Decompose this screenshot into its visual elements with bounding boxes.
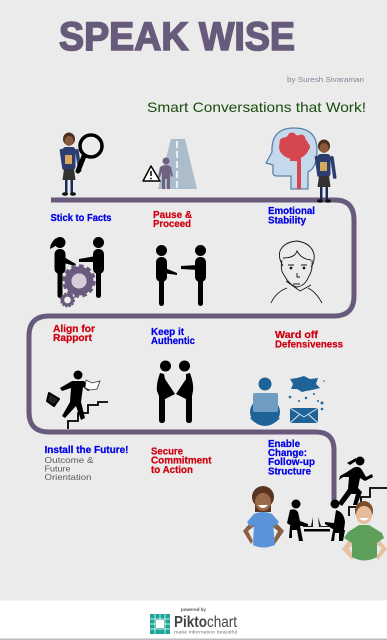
label: Emotional Stability: Emotional — [268, 205, 315, 217]
magnifying glass — [78, 135, 102, 171]
businessman — [60, 370, 92, 420]
label: Keep it Authentic: Keep it — [151, 326, 184, 338]
two people at a table — [287, 500, 345, 541]
label: Enable Change: Follow-up Structure: Follow-up — [268, 456, 315, 468]
large gear — [64, 266, 94, 296]
icon: road with warning sign — [143, 139, 197, 189]
label: Keep it Authentic: Authentic — [151, 335, 195, 347]
label: Secure Commitment to Action — [151, 446, 212, 476]
winding path — [29, 200, 354, 502]
left figure — [156, 245, 177, 306]
text: Outcome and Future Orientation: Outcome & — [44, 455, 94, 465]
left figure — [157, 360, 175, 423]
icon: student with magnifying glass — [60, 132, 102, 196]
label: Emotional Stability — [268, 205, 315, 226]
label: Ward off Defensiveness — [275, 329, 343, 350]
label: Secure Commitment to Action: to Action — [151, 464, 193, 476]
powered by: powered by — [181, 607, 206, 612]
Piktochart logo icon — [150, 614, 170, 634]
illustration: team collaboration — [243, 456, 387, 560]
small gear — [61, 293, 74, 307]
man silhouette — [79, 237, 104, 298]
footer — [0, 600, 387, 640]
student figure — [315, 140, 337, 203]
person — [158, 158, 173, 189]
woman silhouette — [50, 237, 76, 298]
footer background — [0, 600, 387, 638]
brain — [279, 132, 310, 189]
stairs — [68, 402, 108, 429]
running woman on stairs — [338, 456, 387, 516]
label: Pause & Proceed: Pause & — [153, 209, 192, 221]
label: Enable Change: Follow-up Structure: Enable — [268, 438, 300, 450]
right figure — [181, 245, 206, 306]
label: Align for Rapport — [53, 323, 95, 344]
label: Keep it Authentic — [151, 326, 195, 347]
label: Pause & Proceed — [153, 209, 192, 230]
text: Outcome and Future Orientation: Future — [44, 464, 71, 474]
icon: head with brain and student — [266, 128, 337, 203]
man in green shirt — [342, 501, 387, 560]
label: Pause & Proceed: Proceed — [153, 218, 191, 230]
label: Enable Change: Follow-up Structure — [268, 438, 315, 478]
label: Install the Future!: Install the Future! — [44, 444, 128, 456]
burst cloud — [290, 376, 320, 392]
label: Ward off Defensiveness: Ward off — [275, 329, 319, 341]
label: Enable Change: Follow-up Structure: Change: — [268, 447, 307, 459]
author byline: by Suresh Sivaraman — [287, 75, 364, 84]
warning triangle — [143, 166, 160, 181]
text: Outcome and Future Orientation — [44, 455, 94, 482]
label: Secure Commitment to Action: Secure — [151, 446, 183, 458]
stairs — [349, 488, 387, 516]
text: Outcome and Future Orientation: Orientation — [44, 472, 92, 482]
title: SPEAK WISE — [59, 15, 295, 59]
laptop — [253, 393, 278, 412]
tagline: make information beautiful — [174, 630, 237, 634]
label: Emotional Stability: Stability — [268, 214, 306, 226]
label: Align for Rapport: Rapport — [53, 332, 92, 344]
label: Stick to Facts: Stick to Facts — [50, 212, 112, 224]
icon: two people facing — [157, 360, 193, 423]
icon: line-art man face — [271, 241, 322, 303]
icon: person at laptop with angry email — [250, 376, 325, 426]
person — [250, 378, 280, 426]
open book — [85, 380, 100, 390]
student figure — [60, 132, 82, 196]
icon: handshake with gears — [50, 237, 104, 307]
right figure — [176, 360, 193, 423]
label: Align for Rapport: Align for — [53, 323, 95, 335]
woman in blue shirt — [243, 486, 284, 548]
label: Ward off Defensiveness: Defensiveness — [275, 338, 343, 350]
label: Enable Change: Follow-up Structure: Structure — [268, 466, 311, 478]
envelope — [290, 408, 318, 423]
icon: businessman climbing stairs — [47, 370, 108, 429]
icon: handshake — [156, 245, 206, 306]
Piktochart wordmark: Piktochart — [174, 614, 238, 631]
briefcase — [47, 393, 59, 406]
label: Secure Commitment to Action: Commitment — [151, 454, 212, 466]
scattered particles — [289, 380, 325, 410]
head — [266, 128, 317, 189]
road — [158, 139, 197, 189]
subtitle: Smart Conversations that Work! — [147, 99, 366, 115]
